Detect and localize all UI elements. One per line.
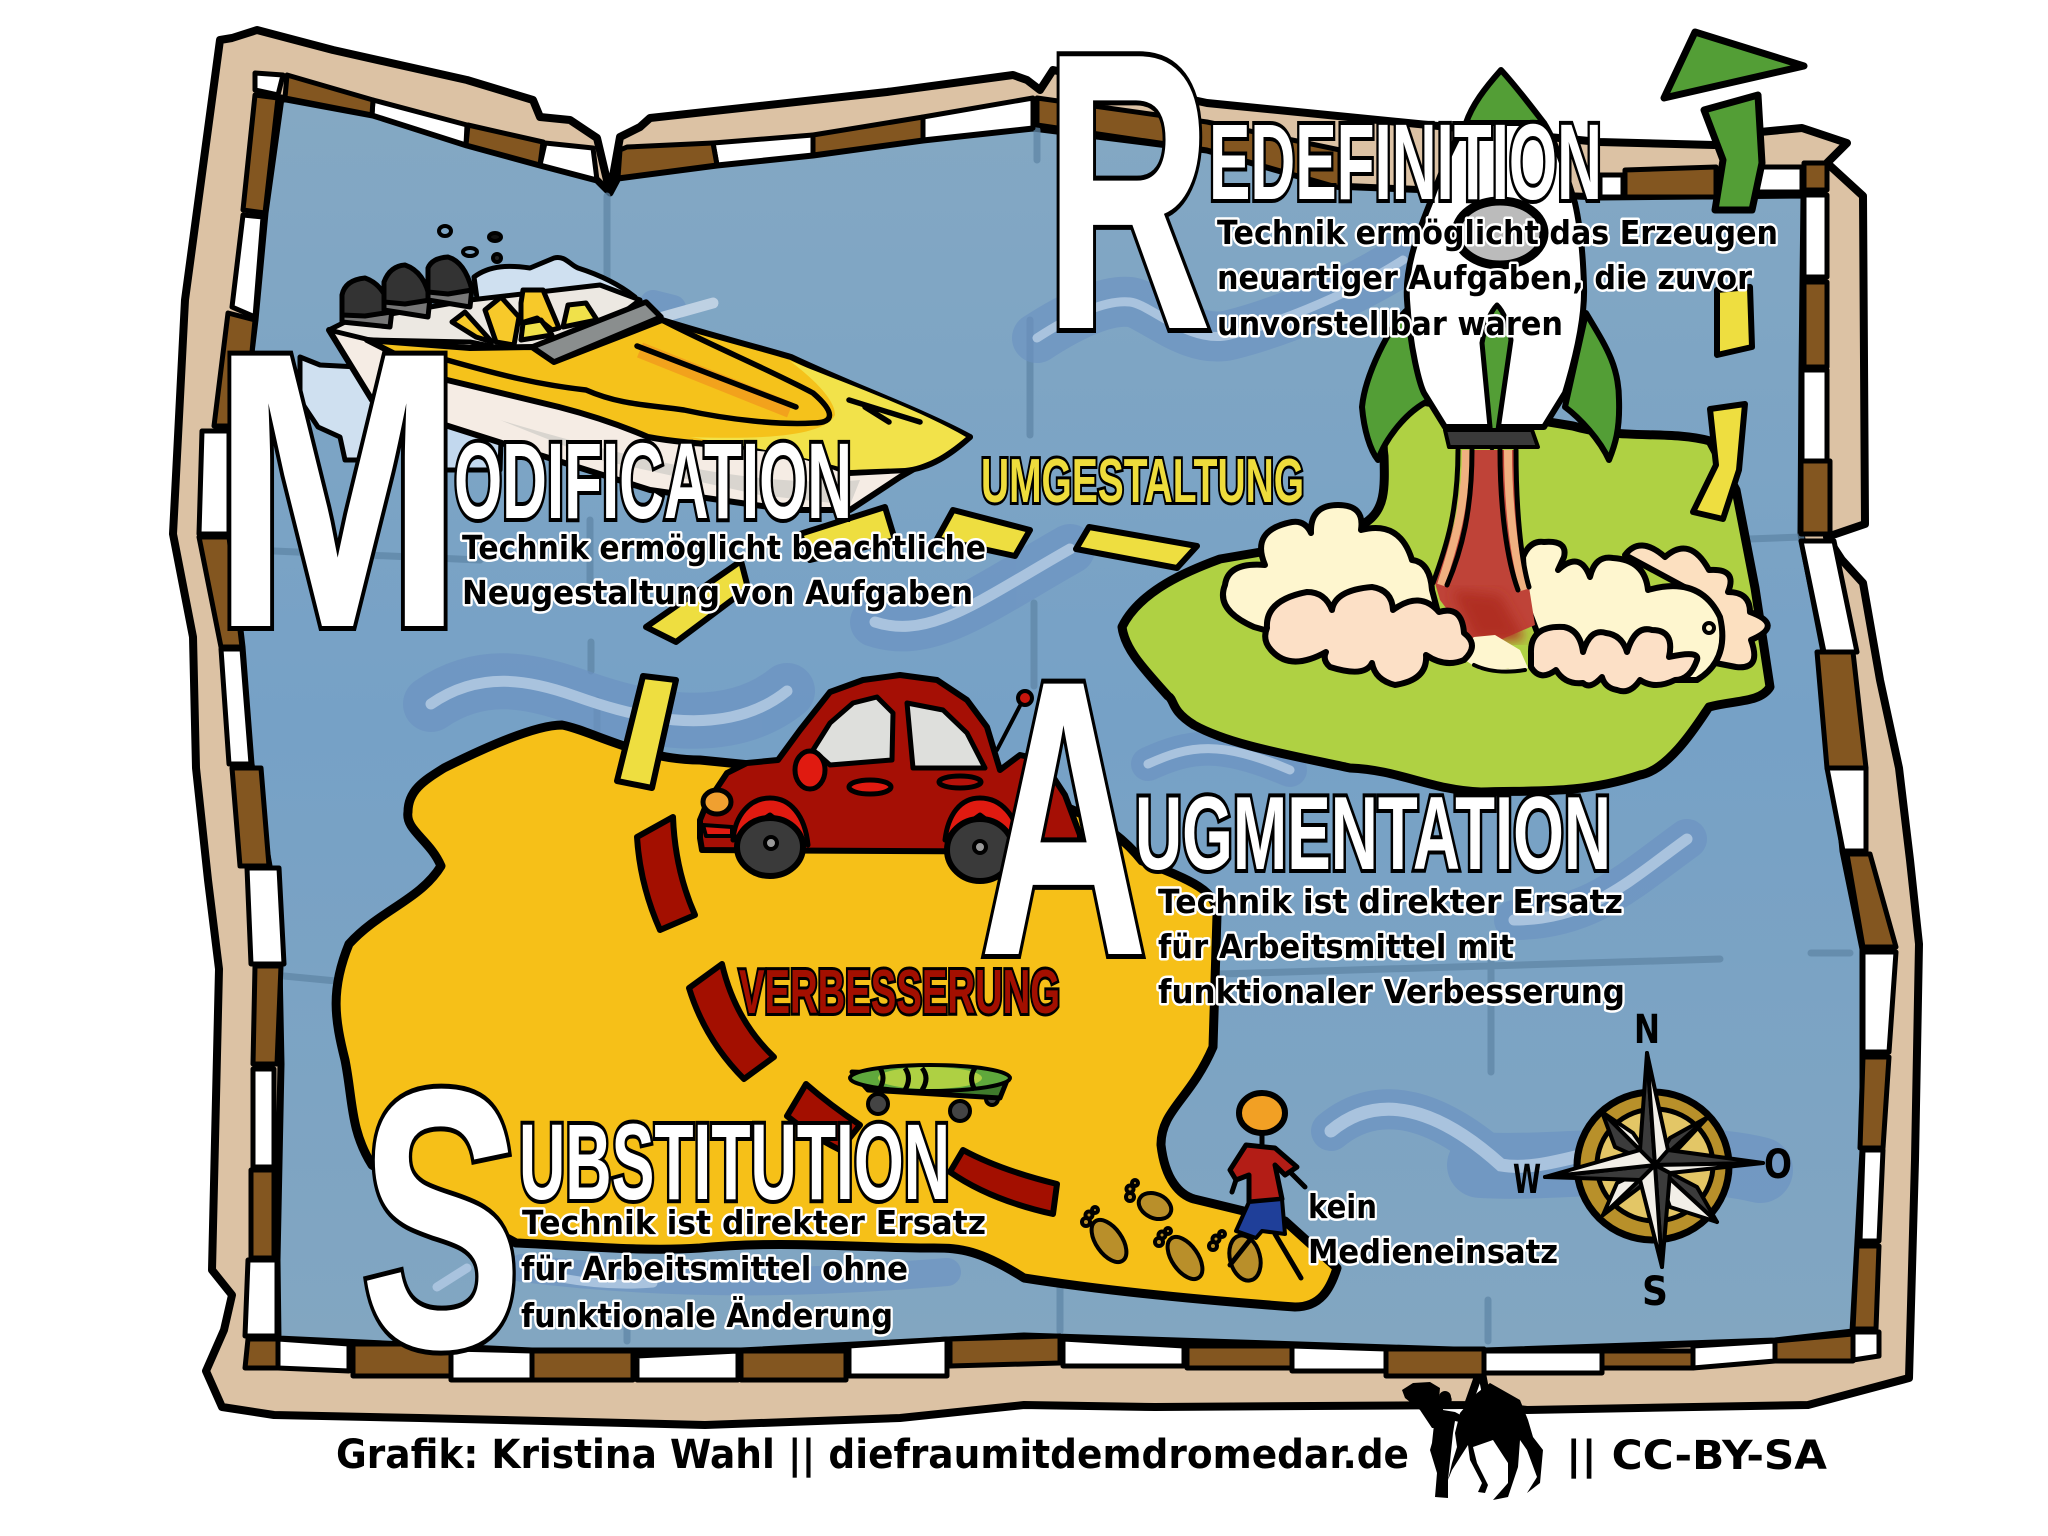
boat deck [367, 320, 970, 473]
compass ring [1577, 1092, 1729, 1240]
text: Redefinition description: unvorstellbar waren [1217, 304, 1563, 343]
heading: Augmentation [979, 599, 1611, 1038]
footer credit: Grafik: Kristina Wahl || diefraumitdemdromedar.de [336, 1432, 1409, 1479]
text: Redefinition description: Technik ermöglicht das Erzeugen [1217, 213, 1778, 252]
water waves [431, 260, 1760, 1287]
flame [1433, 450, 1535, 640]
text: Substitution description: funktionale Änderung [521, 1295, 893, 1335]
compass letters: S [1642, 1269, 1668, 1315]
text: kein Medieneinsatz [1308, 1187, 1558, 1271]
green island [1122, 400, 1770, 792]
person limbs [1230, 1132, 1305, 1278]
bubbles [439, 226, 501, 262]
text: Augmentation description [1158, 882, 1625, 1011]
person head [1239, 1093, 1285, 1133]
skateboard [850, 1065, 1010, 1121]
person shirt [1230, 1145, 1297, 1202]
text: Redefinition description [1217, 213, 1778, 343]
parchment border [173, 30, 1919, 1425]
speedboat [300, 226, 970, 510]
road dashes [617, 287, 1752, 1214]
heading: Augmentation: UGMENTATION [1135, 776, 1611, 892]
checker strip [199, 73, 1896, 1380]
car door details [795, 751, 981, 794]
boat deck stripe [640, 350, 790, 410]
red dashes [637, 817, 1057, 1214]
person shorts [1236, 1199, 1285, 1238]
cloud centre [1464, 635, 1528, 672]
heading: Redefinition [1044, 0, 1602, 412]
flag pole [1704, 95, 1762, 210]
cloud bottom left [1265, 587, 1472, 685]
heading: Substitution [360, 1013, 950, 1426]
car headlight [703, 790, 731, 814]
fold lines [274, 130, 1850, 1341]
compass letters: W [1513, 1157, 1541, 1203]
rocket nozzle [1445, 430, 1538, 447]
car windows [813, 697, 985, 768]
person [1230, 1093, 1305, 1278]
rocket fins [1362, 310, 1619, 460]
icon: camel silhouette [1402, 1382, 1543, 1500]
car bumper [703, 825, 732, 836]
text: Modification description: Technik ermöglicht beachtliche [462, 528, 986, 567]
text: Redefinition description: neuartiger Aufgaben, die zuvor [1217, 258, 1753, 297]
heading: Modification [211, 271, 852, 710]
rocket centre fin [1482, 305, 1511, 448]
heading: Substitution: UBSTITUTION [519, 1101, 950, 1222]
blue sea [229, 98, 1863, 1351]
compass diagonal points [1602, 1112, 1717, 1222]
boat deck lines [447, 320, 920, 423]
text: Modification description: Neugestaltung von Aufgaben [462, 573, 973, 612]
seats [452, 290, 597, 345]
cloud bottom right [1531, 627, 1697, 691]
cloud right [1523, 542, 1722, 680]
text: kein Medieneinsatz: Medieneinsatz [1308, 1232, 1558, 1271]
compass letters [1513, 1007, 1792, 1315]
yellow dashes [617, 287, 1752, 788]
heading: Modification: M [211, 271, 464, 710]
rocket [1362, 70, 1619, 460]
rocket porthole [1456, 201, 1544, 265]
flag pennant [1664, 32, 1804, 98]
heading: Modification: ODIFICATION [454, 420, 852, 541]
windshield [532, 302, 661, 362]
cloud left [1223, 505, 1440, 640]
car wheels [737, 818, 1013, 881]
boat splash [300, 257, 635, 470]
compass inner ring [1597, 1109, 1713, 1221]
person beside camel [1430, 1391, 1470, 1498]
text: Augmentation description: Technik ist direkter Ersatz [1158, 882, 1623, 921]
camel body [1448, 1383, 1543, 1500]
boat nose [690, 361, 966, 470]
text: Modification description [462, 528, 986, 612]
text: kein Medieneinsatz: kein [1308, 1187, 1377, 1226]
treasure map frame [173, 30, 1919, 1425]
footer licence: || CC-BY-SA [1566, 1433, 1827, 1480]
heading: Substitution: S [360, 1013, 522, 1426]
compass letters: N [1634, 1007, 1660, 1053]
clouds and flame [1223, 450, 1768, 691]
engines [342, 257, 472, 327]
label: Umgestaltung: UMGESTALTUNG [981, 447, 1304, 516]
yellow island [336, 725, 1337, 1307]
text: Substitution description: Technik ist direkter Ersatz [522, 1203, 986, 1242]
camel head and neck [1402, 1382, 1445, 1428]
boat hull [329, 320, 970, 510]
car body [700, 675, 1080, 852]
red car [700, 675, 1080, 881]
compass main star [1545, 1053, 1763, 1267]
label: Verbesserung: VERBESSERUNG [739, 958, 1060, 1027]
flag [1664, 32, 1804, 210]
heading: Redefinition: EDEFINITION [1209, 101, 1602, 222]
text: Augmentation description: für Arbeitsmittel mit [1158, 927, 1514, 966]
footprints [1082, 1180, 1265, 1285]
car wheel arches [733, 798, 1020, 845]
boat rear deck [329, 285, 640, 360]
text: Augmentation description: funktionaler Verbesserung [1158, 972, 1625, 1011]
text: Substitution description [521, 1203, 986, 1335]
cloud back right [1625, 545, 1768, 667]
compass [1513, 1007, 1792, 1315]
compass letters: O [1764, 1142, 1792, 1188]
heading: Augmentation: A [979, 599, 1148, 1038]
text: Substitution description: für Arbeitsmittel ohne [521, 1249, 908, 1288]
car antenna [997, 691, 1032, 750]
rocket body [1407, 123, 1584, 427]
rocket nose [1450, 70, 1555, 150]
